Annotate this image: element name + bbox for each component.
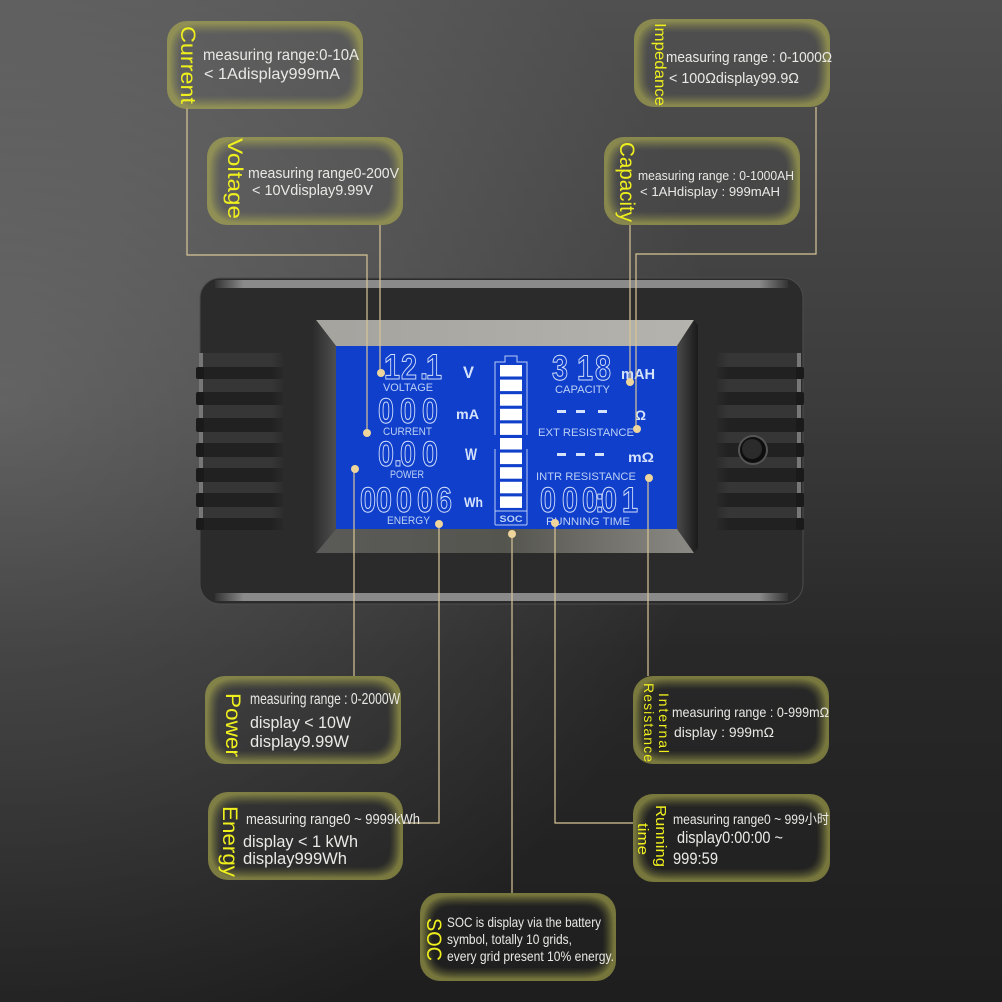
callout: power <box>205 676 401 764</box>
running time reading: RUNNING TIME <box>546 516 630 528</box>
capacity reading <box>552 348 655 396</box>
running time reading: 000:01 <box>540 480 638 520</box>
callout: energy: Energy <box>218 806 241 878</box>
callout: internal resistance: Resistance <box>641 683 657 762</box>
callout: voltage: < 10Vdisplay9.99V <box>252 182 373 199</box>
internal resistance reading: INTR RESISTANCE <box>536 471 636 483</box>
callout: energy: measuring range0 ~ 9999kWh <box>246 811 420 828</box>
callout: capacity: Capacity <box>615 142 638 222</box>
callout: internal resistance: display : 999mΩ <box>674 724 774 740</box>
leader line: running time <box>551 519 633 823</box>
leader line: energy <box>403 520 443 823</box>
callout: capacity <box>604 137 800 225</box>
callout: SOC <box>420 893 616 981</box>
battery SOC gauge: SOC <box>500 514 523 525</box>
callout: running time: 999:59 <box>673 849 718 868</box>
capacity reading: CAPACITY <box>555 384 611 396</box>
callout: energy: display999Wh <box>243 849 347 868</box>
device: battery monitor <box>196 278 804 604</box>
leader line: voltage <box>377 225 385 377</box>
leader line: internal resistance <box>645 474 653 676</box>
callout: impedance: measuring range : 0-1000Ω <box>666 49 832 66</box>
callout: internal resistance: Internal <box>656 693 672 753</box>
voltage reading: 12.1 <box>384 347 442 387</box>
current reading: mA <box>456 406 479 422</box>
device body <box>200 278 803 604</box>
callout: running time <box>633 794 830 882</box>
voltage reading: VOLTAGE <box>383 382 433 394</box>
energy reading: Wh <box>464 494 483 510</box>
leader line: SOC <box>508 530 516 893</box>
left vent <box>196 353 283 530</box>
callout: capacity: < 1AHdisplay : 999mAH <box>640 185 780 199</box>
callout: running time: measuring range0 ~ 999小时 <box>673 812 829 827</box>
callout: current <box>167 21 363 109</box>
leader line: impedance <box>633 107 816 433</box>
leader line: power <box>351 465 359 676</box>
external resistance reading: Ω <box>635 407 646 423</box>
callout: SOC: symbol, totally 10 grids, <box>447 931 572 947</box>
callout: power: Power <box>221 693 244 757</box>
callout: power: display < 10W <box>250 713 351 732</box>
callout: current: < 1Adisplay999mA <box>204 66 340 83</box>
callout: SOC: every grid present 10% energy. <box>447 948 614 964</box>
right vent <box>717 353 804 530</box>
power reading: POWER <box>390 469 424 481</box>
power reading: W <box>465 445 478 464</box>
callout: energy: display < 1 kWh <box>243 832 358 851</box>
leader line: capacity <box>626 225 634 386</box>
callout: current: Current <box>176 26 199 104</box>
power reading: 0.00 <box>378 434 438 474</box>
callout: SOC: SOC is display via the battery <box>447 914 601 930</box>
current reading <box>378 391 479 438</box>
callout: internal resistance <box>633 676 829 764</box>
leader line: current <box>187 108 371 437</box>
energy reading <box>360 480 483 527</box>
current reading: 000 <box>378 391 438 431</box>
callout: power: display9.99W <box>250 732 349 751</box>
voltage reading: V <box>463 363 475 382</box>
callout: capacity: measuring range : 0-1000AH <box>638 169 794 183</box>
callout: running time: time <box>634 823 651 855</box>
energy reading: ENERGY <box>387 515 431 527</box>
callout: impedance: Impedance <box>651 23 668 106</box>
voltage reading <box>383 347 475 394</box>
capacity reading: 318 <box>552 348 611 388</box>
LCD screen <box>336 346 677 529</box>
external resistance reading <box>538 407 646 439</box>
callout: voltage: measuring range0-200V <box>248 165 399 182</box>
power reading <box>378 434 478 481</box>
callout: SOC: SOC <box>422 918 445 961</box>
internal resistance reading: mΩ <box>628 449 654 465</box>
callout: running time: Running <box>652 805 669 867</box>
energy reading: 00006 <box>360 480 452 520</box>
callout: running time: display0:00:00 ~ <box>677 828 783 847</box>
battery SOC gauge <box>495 356 527 525</box>
external resistance reading: EXT RESISTANCE <box>538 427 634 439</box>
callout: power: measuring range : 0-2000W <box>250 691 401 708</box>
callout: energy <box>208 792 420 880</box>
callout: impedance: < 100Ωdisplay99.9Ω <box>669 70 799 87</box>
callout: impedance <box>634 19 832 107</box>
current reading: CURRENT <box>383 426 432 438</box>
callout: internal resistance: measuring range : 0-999mΩ <box>672 704 829 720</box>
bezel <box>313 320 698 553</box>
callout: voltage <box>207 137 403 225</box>
callout: voltage: Voltage <box>223 138 246 219</box>
capacity reading: mAH <box>621 366 655 383</box>
callout: current: measuring range:0-10A <box>203 47 359 64</box>
internal resistance reading <box>536 449 654 483</box>
icon: round button <box>738 435 768 465</box>
